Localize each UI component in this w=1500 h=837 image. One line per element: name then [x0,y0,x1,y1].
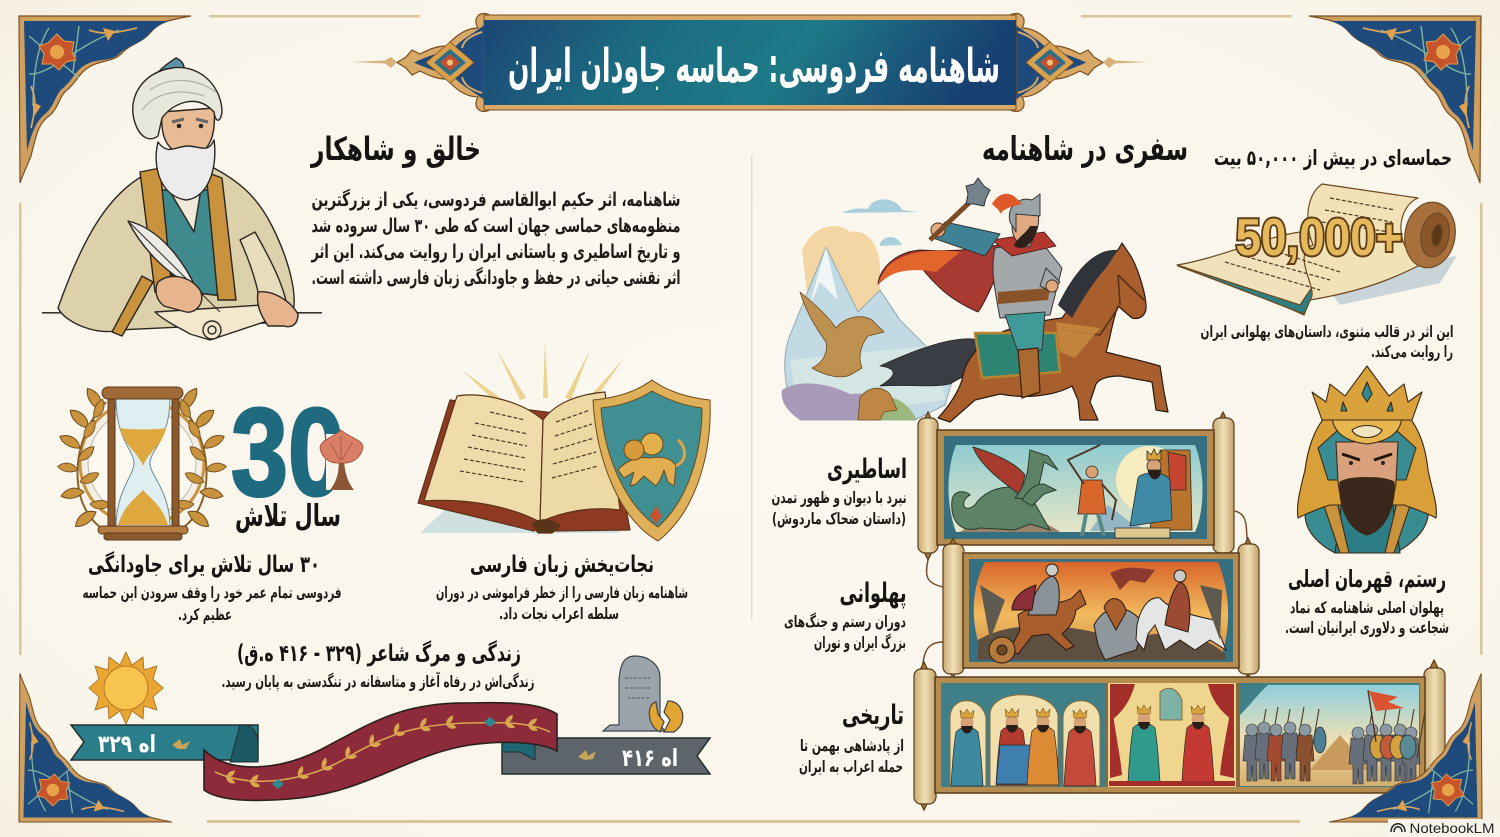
heading: creator and masterpiece: خالق و شاهکار [310,130,481,168]
panel: thirty years [57,384,363,624]
panel: scroll one, mythological [772,412,1234,560]
panel: journey through the Shahnameh [782,129,1188,422]
text: verse count description: را روایت می‌کند. [1371,342,1453,361]
banner flourishes [352,57,1147,68]
ribbon: start year 329: اه ۳۲۹ [98,730,156,758]
icon: open book [418,392,630,533]
text: verse count description [1200,322,1454,361]
text: saviour description: شاهنامه زبان فارسی را از خطر فراموشی در دوران [436,583,688,602]
ribbon: start year 329 [71,725,258,762]
illustration: Rostam in lion helmet [1297,366,1436,553]
corner ornament: top right [1309,16,1481,183]
panel: Rostam [1285,366,1449,637]
text: historical [799,700,904,776]
icon: long scroll [1177,184,1460,315]
scroll frame and battle scene [963,553,1239,668]
illustration: hero on horseback with mountains and dragons [782,178,1168,422]
text: saviour description [436,583,688,623]
rider body [993,240,1062,318]
text: mythological: نیرد با دیوان و ظهور تمدن [772,488,906,507]
heading: journey: سفری در شاهنامه [982,129,1188,169]
corner ornament: bottom left [19,673,172,822]
horse [938,243,1168,422]
heading: thirty years for immortality: ۳۰ سال تلاش یرای جاودانگی [88,551,320,578]
turban [148,58,184,92]
icon: flower tree [320,430,363,490]
text: mythological [772,454,907,528]
ribbon: end year 416: اه ۴۱۶ [622,744,678,772]
panel: scroll two, heroic [784,538,1259,678]
title banner [352,13,1147,112]
connector: scroll two [922,560,943,670]
number 50,000+: 50,000+ [1236,209,1402,267]
number 30: 30 [231,384,345,522]
text: heroic: بزرگ ایران و توران [814,633,906,652]
corner ornament: bottom right [1329,673,1482,822]
text: heroic: پهلوانی [840,578,906,609]
ribbon: end year 416 [502,738,710,774]
banner body [484,15,1016,110]
dragon [952,447,1058,530]
clouds and mountains [802,226,880,320]
feather [128,221,196,288]
scroll rollers [943,538,1259,678]
court arches [950,695,1100,786]
paragraph: منظومه‌های حماسی جهان است که طی ۳۰ سال سروده شد [312,215,680,237]
grey horse [1094,599,1145,660]
connector: scroll one to two [1235,511,1248,548]
hero [1068,445,1116,536]
ribbon: crimson life path [204,703,557,800]
text: thirty years description: فردوسی تمام عمر خود را وقف سرودن این حماسه [82,583,342,602]
paragraph: شاهنامه، اثر حکیم ابوالقاسم فردوسی، یکی از بزرگترین [312,188,680,211]
panel: scroll three, historical [799,660,1445,810]
face and beard [162,108,214,158]
scroll frame and historical scenes [935,677,1425,793]
panel: life and death timeline [71,640,710,800]
brown horse and rider [989,564,1086,663]
text: thirty years description [82,583,342,624]
title: شاهنامه فردوسی: حماسه جاودان ایران [508,39,1000,94]
scroll [155,305,270,340]
icon: rays of light [462,340,624,406]
paragraph [311,188,680,289]
scroll rollers [918,412,1234,560]
text: Rostam description [1285,598,1449,637]
scroll rollers [914,660,1445,810]
text: thirty years description: عظیم کرد. [178,605,232,624]
icon: sun [89,652,163,724]
text: mythological: اساطیری [827,454,907,485]
hands [156,276,202,312]
text: heroic: دوران رستم و جنگ‌های [784,612,906,631]
watermark: NotebookLM: NotebookLM [1410,820,1494,836]
rider head [1012,206,1039,247]
mace [930,200,972,240]
panel: verse count [1177,146,1460,361]
banner right ornament [1010,13,1103,112]
text: saviour description: سلطه اعراب نجات داد. [499,604,619,623]
text: heroic [784,578,906,652]
army scene [1240,685,1419,786]
heading: saviour of the Persian language: نجات‌یخش زبان فارسی [470,552,654,578]
banner left ornament [397,13,490,112]
panel: saviour of Persian [418,340,710,623]
text: historical: از پادشاهی بهمن تا [800,736,904,756]
text: historical: حمله اعراب به ایران [799,757,903,776]
watermark: NotebookLM [1388,819,1500,837]
illustration: Ferdowsi the poet [42,58,322,340]
corner ornament: top left [19,16,191,183]
icon: gravestone and broken coin [603,656,683,732]
throne room [1107,683,1237,787]
tail [880,339,985,386]
text: mythological: (داستان ضحاک ماردوش) [772,509,906,528]
paragraph: و تاریخ اساطیری و باستانی ایران را روایت می‌کند. این اثر [311,241,680,263]
dragon [800,292,884,377]
text: historical: تاریخی [842,700,904,731]
rider cape [878,244,1010,312]
panel: creator and masterpiece [42,58,680,340]
king on throne [1115,449,1192,538]
icon: shield with lion and sun [593,380,710,541]
text: timeline description: زندگی‌اش در رفاه آغاز و متاسفانه در تنگدستی به پایان رسید. [222,671,534,692]
icon: hourglass with laurel wreath [57,385,227,540]
heading: life and death: زندگی و مرگ شاعر (۳۲۹ - ۴۱۶ ه.ق) [237,640,521,667]
white horse and rider [1136,570,1226,650]
scroll frame and scene [937,430,1214,545]
paragraph: اثر نقشی حیاتی در حفظ و جاودانگی زبان فارسی داشته است. [312,266,680,289]
label: years of effort: سال تلاش [235,499,341,534]
